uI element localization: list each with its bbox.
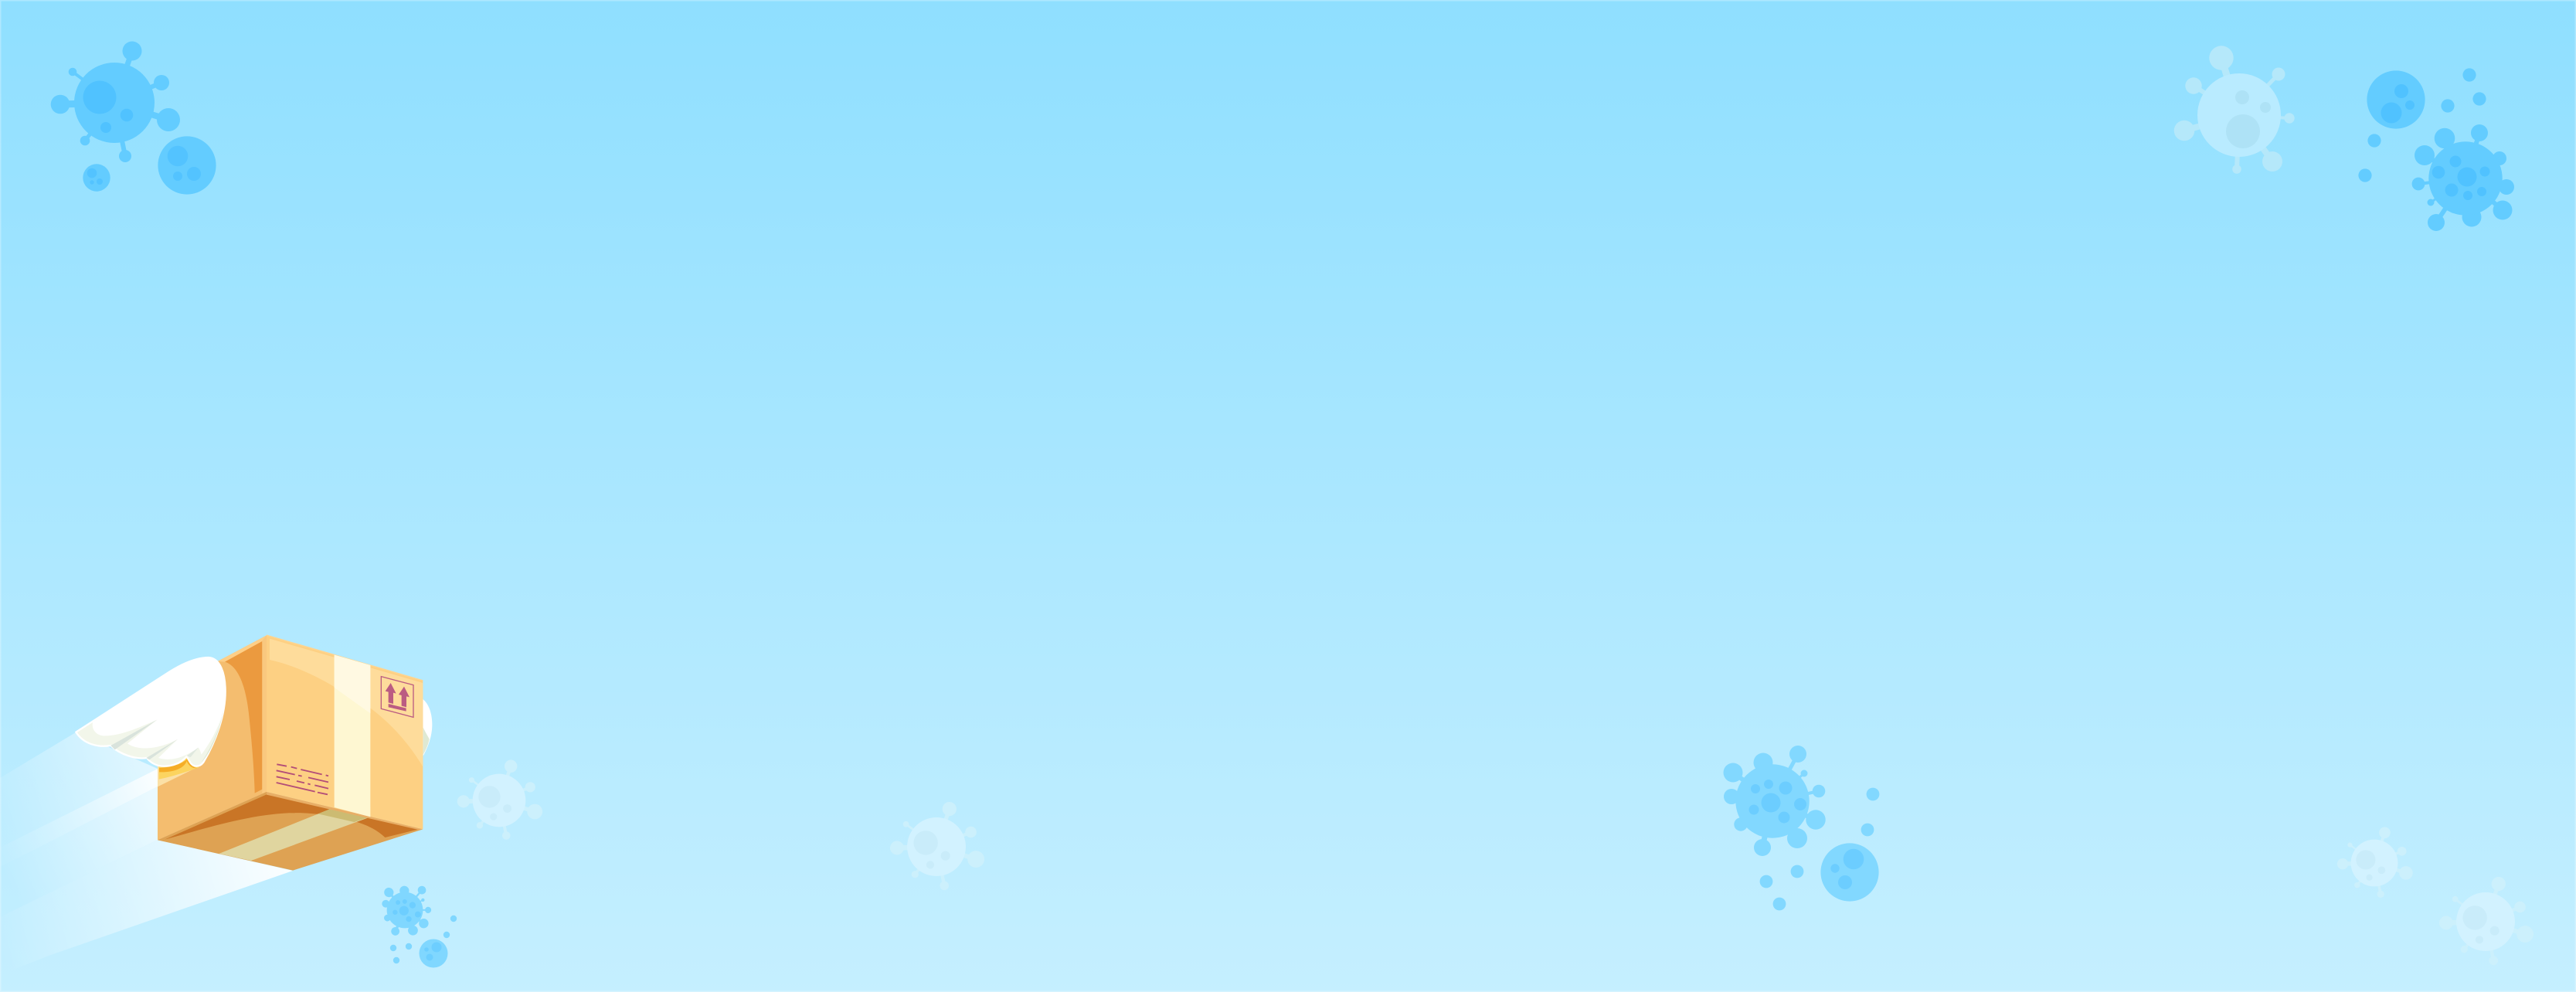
droplets: lower — [1760, 788, 1879, 910]
virus particle: lower round — [1820, 843, 1879, 902]
icon: this way up arrows — [381, 677, 413, 717]
droplets: top right — [2358, 68, 2486, 182]
virus cluster: top left — [51, 42, 216, 195]
virus: pale near parcel — [457, 760, 542, 840]
virus particle: top left small — [83, 164, 110, 192]
virus cluster: top right — [2358, 68, 2514, 231]
virus: pale lower right small — [2337, 827, 2413, 898]
box left face — [158, 635, 267, 840]
virus particle: top right round — [2367, 70, 2425, 129]
virus: large top left — [51, 42, 180, 162]
virus: small spiky — [376, 878, 436, 942]
virus particle: small round — [419, 939, 448, 967]
box bottom face — [158, 792, 423, 871]
virus: lower spiky — [1723, 746, 1826, 856]
box front face — [267, 635, 423, 830]
virus: pale lower right large — [2439, 877, 2534, 965]
near wing — [76, 657, 226, 766]
shipping label lines — [277, 764, 328, 794]
wing shadow on box — [158, 756, 199, 786]
virus particle: top left round — [158, 136, 216, 195]
cardboard box — [158, 635, 423, 871]
virus: top right spiky — [2412, 124, 2514, 231]
far wing — [423, 698, 432, 756]
virus: pale top right — [2174, 46, 2295, 174]
droplets: small — [390, 916, 457, 963]
virus cluster: lower centre right — [1723, 746, 1879, 910]
speed trails behind parcel — [0, 732, 293, 975]
virus: pale centre — [890, 802, 984, 890]
parcel box with wings — [76, 635, 432, 871]
packing tape — [335, 655, 370, 817]
virus cluster: small near parcel — [376, 878, 457, 967]
